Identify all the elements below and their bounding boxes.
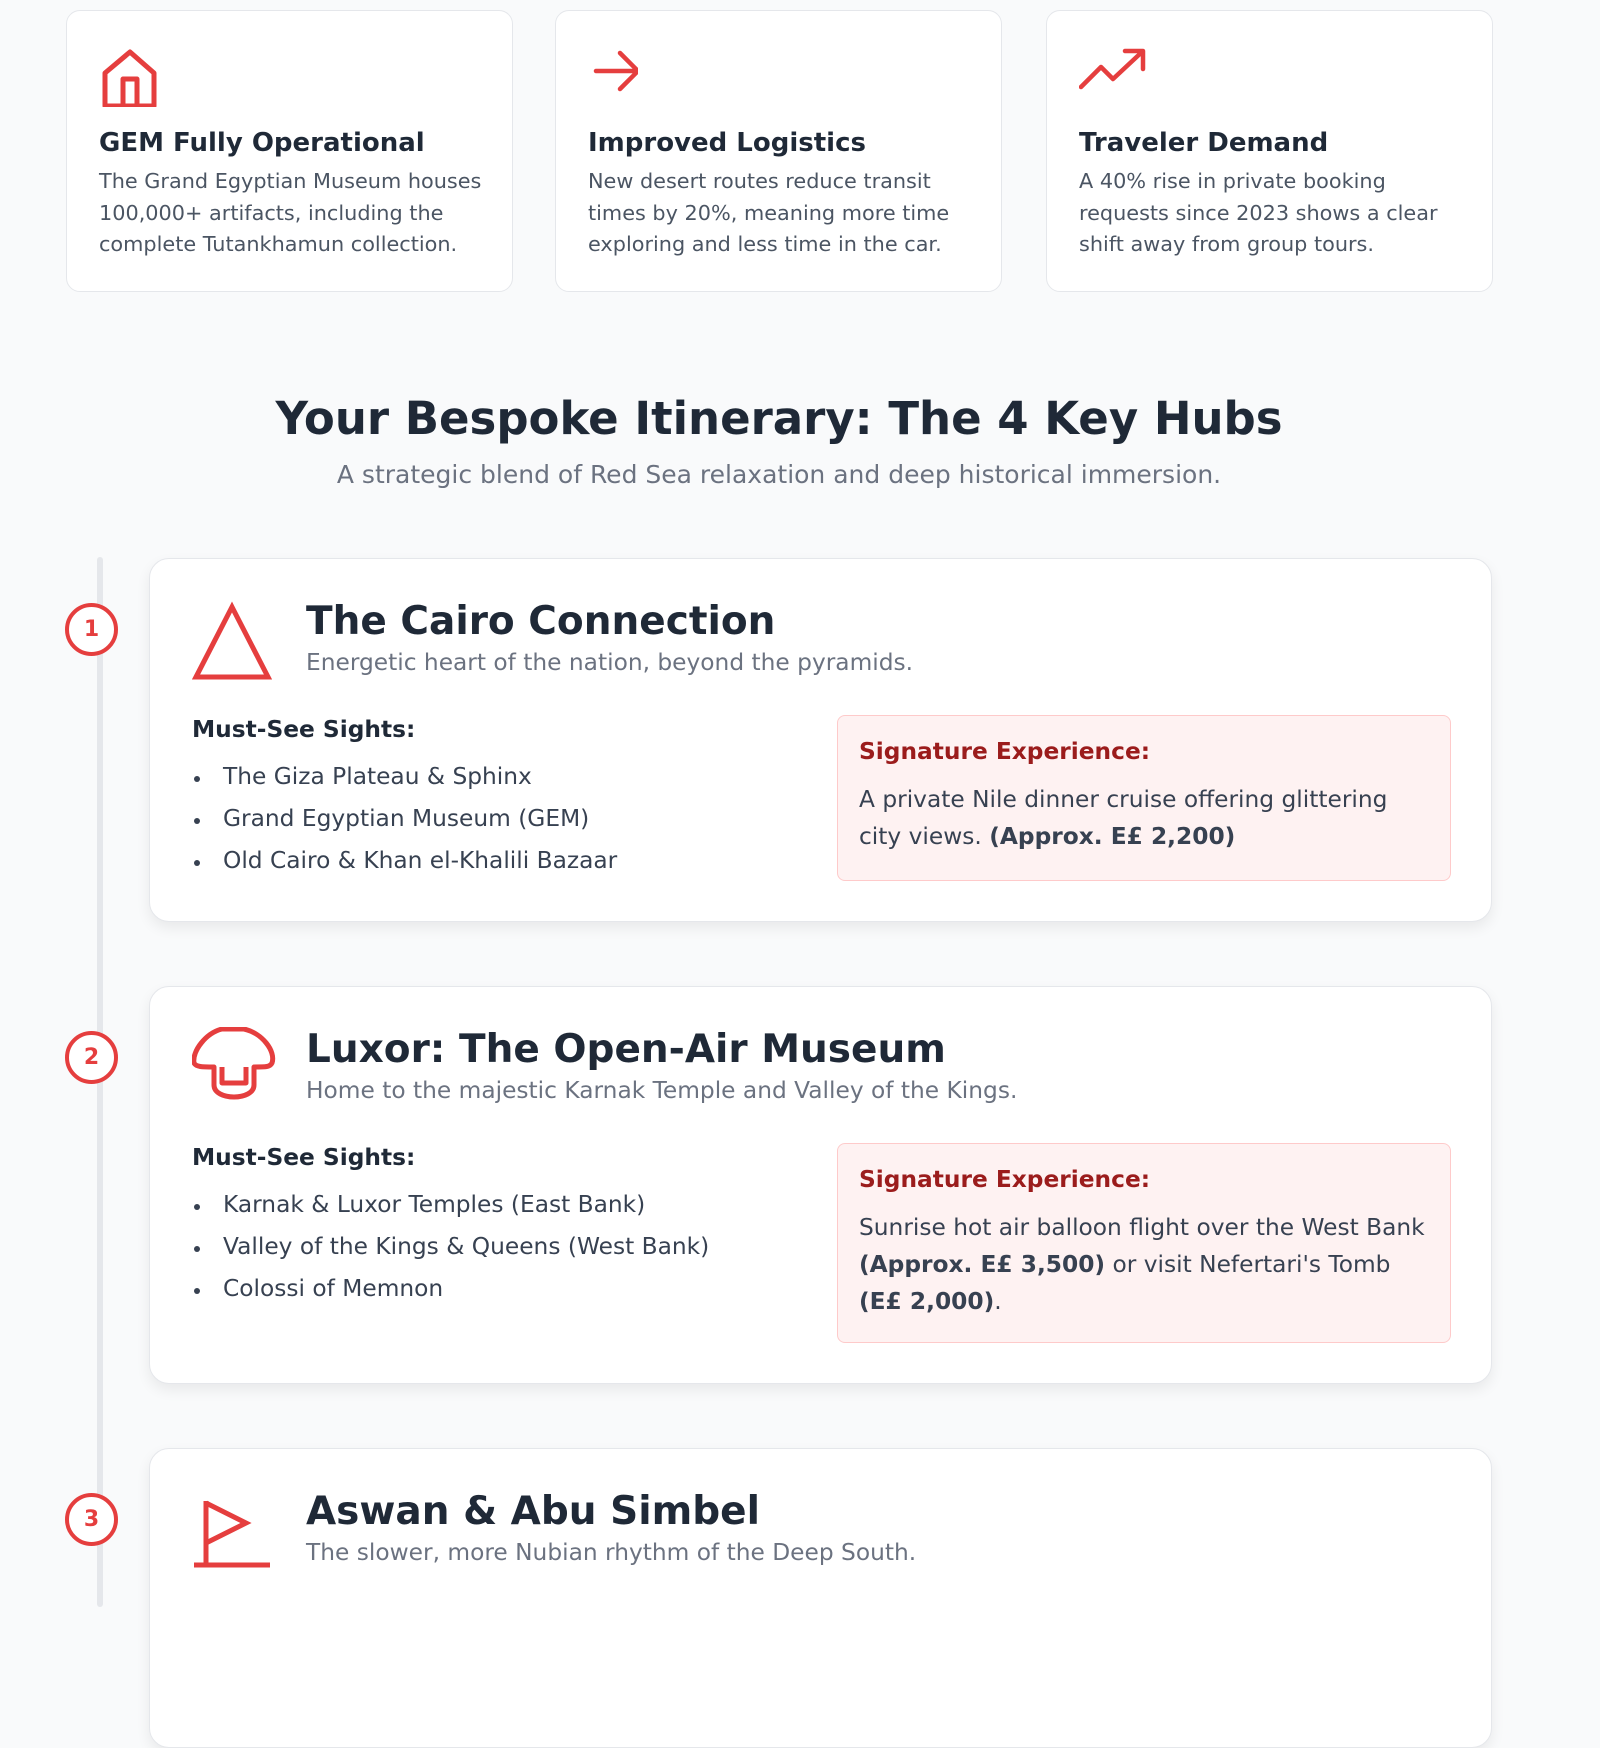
- icon: house: [102, 49, 156, 107]
- callout: [837, 715, 1451, 881]
- subtitle: A strategic blend of Red Sea relaxation and deep historical immersion.: [337, 460, 1221, 489]
- marker 3: 3: [84, 1507, 99, 1532]
- subheading: Home to the majestic Karnak Temple and Valley of the Kings.: [306, 1077, 1017, 1104]
- panel: Luxor: [149, 986, 1492, 1384]
- timeline line: [97, 557, 103, 1607]
- heading: Traveler Demand: [1079, 128, 1328, 158]
- callout: [837, 1143, 1451, 1343]
- list: Karnak & Luxor Temples (East Bank): [223, 1191, 645, 1218]
- icon: balloon: [192, 1027, 276, 1100]
- panel: Traveler Demand: [1046, 10, 1493, 292]
- text: A 40% rise in private booking requests since 2023 shows a clear shift away from group tours.: [1079, 169, 1438, 256]
- subheading: The slower, more Nubian rhythm of the Deep South.: [306, 1539, 916, 1566]
- marker 1: [65, 603, 118, 656]
- icon: trend up: [1079, 48, 1146, 90]
- subheading: Energetic heart of the nation, beyond the pyramids.: [306, 649, 913, 676]
- marker 1: 1: [84, 617, 99, 642]
- list: [194, 763, 618, 874]
- heading: The Cairo Connection: [306, 599, 775, 644]
- callout: Signature Experience:: [859, 1166, 1150, 1193]
- heading: Improved Logistics: [588, 128, 866, 158]
- list: Old Cairo & Khan el-Khalili Bazaar: [223, 847, 617, 874]
- marker 2: 2: [84, 1045, 99, 1070]
- list: Colossi of Memnon: [223, 1275, 443, 1302]
- panel: Cairo: [149, 558, 1492, 922]
- marker 2: [65, 1031, 118, 1084]
- icon: pyramid: [192, 602, 272, 680]
- list: [194, 1191, 709, 1302]
- label: Must-See Sights:: [192, 716, 415, 743]
- heading: Aswan & Abu Simbel: [306, 1489, 760, 1534]
- callout: Sunrise hot air balloon flight over the West Bank (Approx. E£ 3,500) or visit Nefertari's Tomb (E£ 2,000).: [859, 1214, 1425, 1315]
- marker 3: [65, 1493, 118, 1546]
- list: The Giza Plateau & Sphinx: [223, 763, 532, 790]
- text: The Grand Egyptian Museum houses 100,000+ artifacts, including the complete Tutankhamun collection.: [99, 169, 481, 256]
- panel: Improved Logistics: [555, 10, 1002, 292]
- callout: Signature Experience:: [859, 738, 1150, 765]
- list: Valley of the Kings & Queens (West Bank): [223, 1233, 709, 1260]
- panel: Aswan: [149, 1448, 1492, 1748]
- heading: GEM Fully Operational: [99, 128, 425, 158]
- icon: arrow: [594, 50, 638, 92]
- callout: A private Nile dinner cruise offering glittering city views. (Approx. E£ 2,200): [859, 786, 1387, 850]
- heading: Luxor: The Open-Air Museum: [306, 1027, 946, 1072]
- label: Must-See Sights:: [192, 1144, 415, 1171]
- text: New desert routes reduce transit times by 20%, meaning more time exploring and less time in the car.: [588, 169, 949, 256]
- panel: GEM Fully Operational: [66, 10, 513, 292]
- title: Your Bespoke Itinerary: The 4 Key Hubs: [275, 392, 1283, 445]
- icon: flag: [194, 1500, 270, 1568]
- list: Grand Egyptian Museum (GEM): [223, 805, 589, 832]
